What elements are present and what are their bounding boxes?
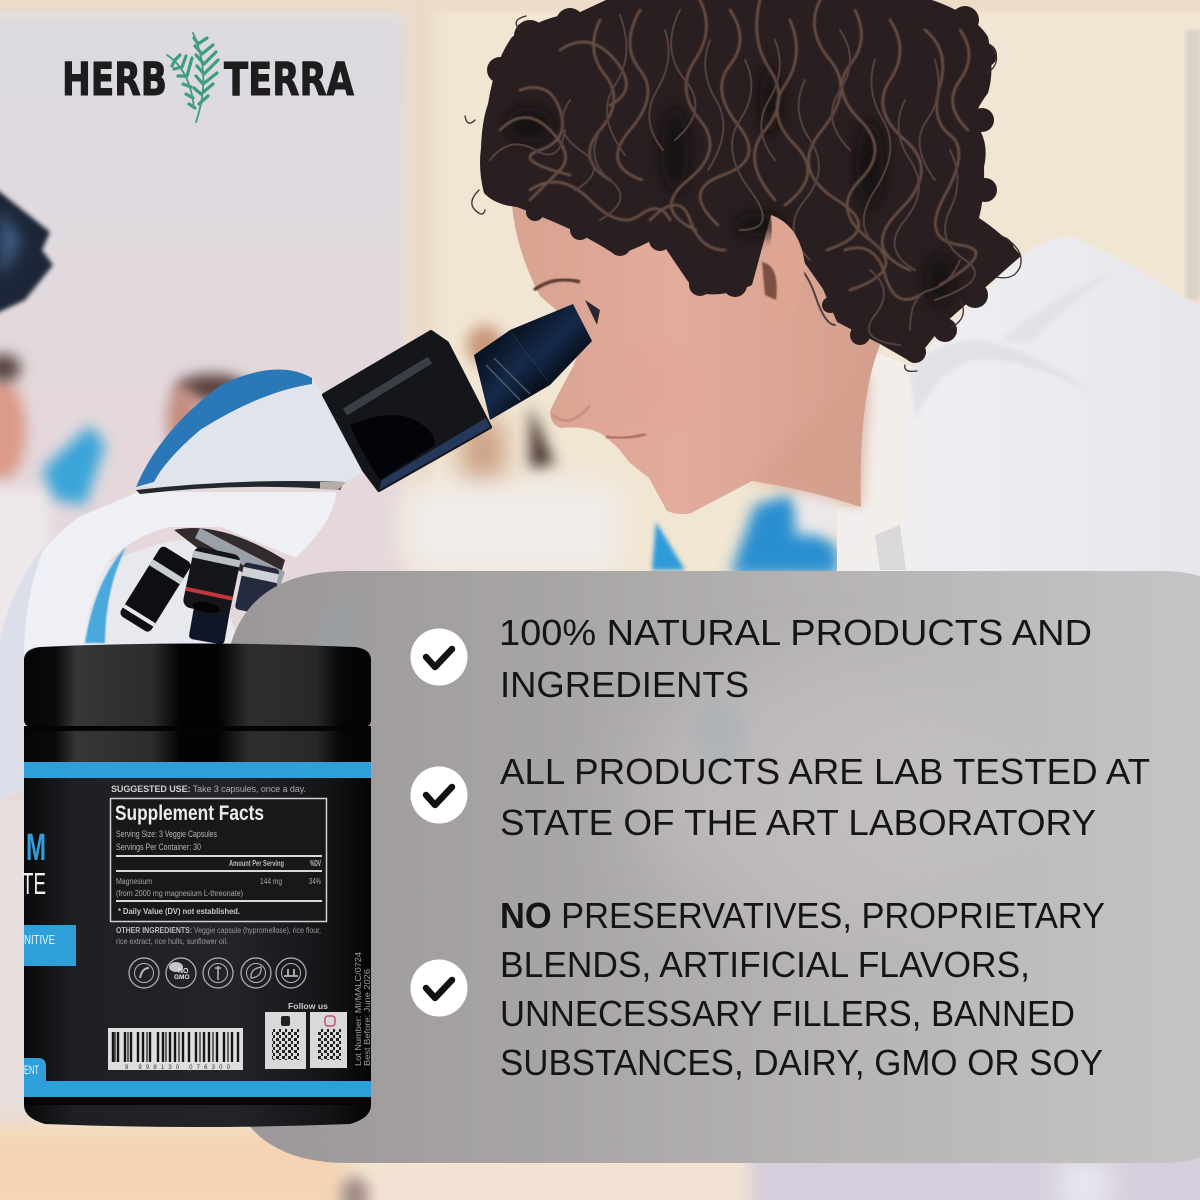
jar body xyxy=(24,728,371,1127)
product name fragment: TE xyxy=(22,866,46,901)
jar shoulder xyxy=(24,730,371,762)
translucent grey panel xyxy=(224,571,1200,1163)
hair xyxy=(465,0,1021,371)
benefit 2 xyxy=(410,751,1150,843)
microscope xyxy=(0,304,592,800)
supplement facts box: %DV xyxy=(310,859,321,868)
text: lab tested: ALL PRODUCTS ARE LAB TESTED AT xyxy=(500,751,1150,792)
barcode: 9 998130 076300 xyxy=(125,1065,231,1071)
eyepiece tubes xyxy=(324,304,592,490)
microscope arm xyxy=(0,492,336,800)
text: lab tested xyxy=(500,751,1150,843)
supplement facts box: 144 mg xyxy=(260,877,282,886)
benefit 1 xyxy=(410,612,1092,705)
text: natural products: INGREDIENTS xyxy=(500,664,749,705)
supplement facts box: * Daily Value (DV) not established. xyxy=(118,906,240,916)
text: natural products xyxy=(499,612,1092,705)
supplement facts box: Servings Per Container: 30 xyxy=(116,842,201,852)
certification badges xyxy=(129,958,306,988)
product name fragment: ENT xyxy=(24,1063,39,1077)
icon: check mark xyxy=(410,766,468,824)
supplement facts box: Serving Size: 3 Veggie Capsules xyxy=(116,829,217,839)
logo: Herb Terra xyxy=(62,33,354,122)
face xyxy=(512,170,880,514)
lot number: Lot Number: MI/MALC/0724 xyxy=(354,951,363,1066)
text: no additives: BLENDS, ARTIFICIAL FLAVORS, xyxy=(500,944,1030,985)
lot number: Best Before: June 2026 xyxy=(363,968,372,1066)
follow us and QR codes xyxy=(265,1001,347,1069)
other ingredients: OTHER INGREDIENTS: Veggie capsule (hypromellose), rice flour, xyxy=(116,926,321,935)
product name fragment: M xyxy=(26,827,46,869)
supplement facts box: 34% xyxy=(309,877,321,886)
text: lab tested: STATE OF THE ART LABORATORY xyxy=(500,802,1096,843)
product name fragment: NITIVE xyxy=(24,932,55,947)
supplement facts box: (from 2000 mg magnesium L-threonate) xyxy=(116,889,243,898)
product jar xyxy=(22,644,372,1127)
text: natural products: 100% NATURAL PRODUCTS AND xyxy=(499,612,1092,653)
icon: check mark xyxy=(410,628,468,686)
objective lenses xyxy=(119,528,285,645)
barcode xyxy=(108,1028,243,1071)
product name fragment xyxy=(22,827,55,1077)
icon: herb leaf xyxy=(167,33,218,122)
supplement facts box: Supplement Facts xyxy=(115,802,264,825)
suggested use: SUGGESTED USE: Take 3 capsules, once a day. xyxy=(111,784,306,794)
lab coat xyxy=(837,237,1200,590)
logo: Herb Terra: TERRA xyxy=(224,53,354,106)
certification badges: NO xyxy=(178,968,189,975)
benefit 3 xyxy=(410,895,1105,1083)
jar lid xyxy=(24,644,371,727)
ear xyxy=(758,215,805,327)
supplement facts box xyxy=(110,798,326,922)
supplement facts box: Amount Per Serving xyxy=(229,859,284,868)
icon: check mark xyxy=(410,960,468,1016)
microscope head xyxy=(136,369,364,494)
logo: Herb Terra: HERB xyxy=(62,53,167,106)
text: no additives xyxy=(500,895,1105,1083)
text: no additives: UNNECESSARY FILLERS, BANNED xyxy=(500,993,1075,1034)
other ingredients: rice extract, rice hulls, sunflower oil. xyxy=(116,937,228,946)
blue label bands xyxy=(24,762,371,1097)
supplement facts box: Magnesium xyxy=(116,877,152,886)
certification badges: GMO xyxy=(174,974,190,981)
follow us and QR codes: Follow us xyxy=(288,1001,328,1011)
other ingredients xyxy=(116,926,321,946)
text: no additives: NO PRESERVATIVES, PROPRIETARY xyxy=(500,895,1105,936)
lot number xyxy=(354,951,372,1066)
text: no additives: SUBSTANCES, DAIRY, GMO OR SOY xyxy=(500,1042,1103,1083)
scientist xyxy=(465,0,1200,590)
